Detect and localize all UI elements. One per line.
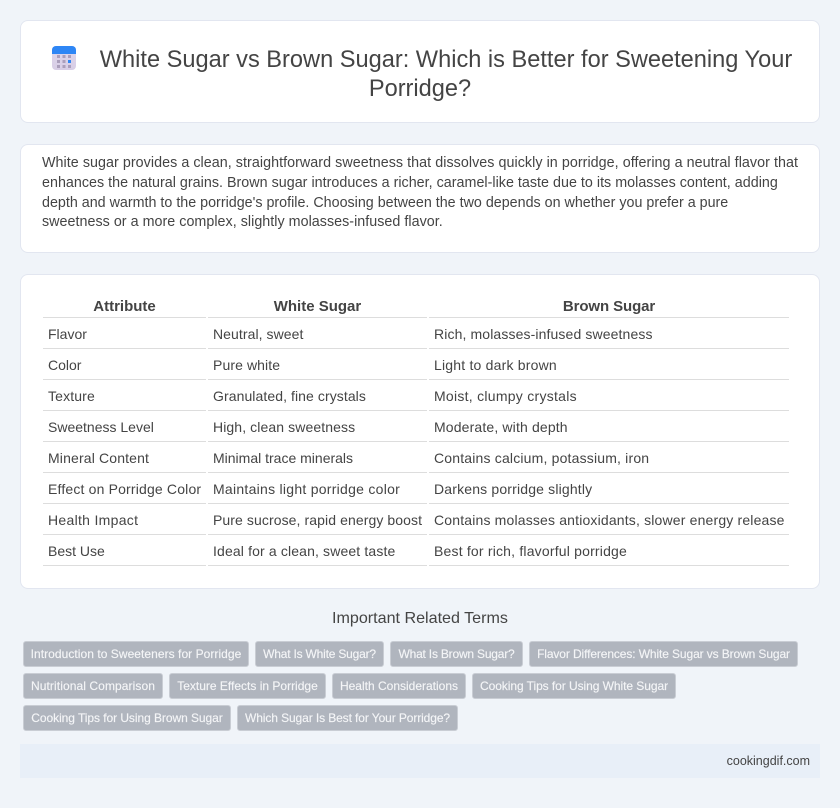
table: comparison: Moderate, with depth (434, 419, 568, 435)
panel: description (20, 144, 820, 253)
tag list: What Is Brown Sugar? (398, 647, 515, 661)
tag list: Nutritional Comparison (31, 679, 155, 693)
table: comparison: Texture (48, 388, 95, 404)
heading: important related terms: Important Related Terms (332, 609, 508, 627)
table: comparison: Best Use (48, 543, 105, 559)
title (100, 47, 792, 102)
text block: description: sweetness or a more complex, slightly molasses-infused flavor. (42, 214, 443, 230)
tag list (23, 641, 798, 731)
tag list: What Is White Sugar? (263, 647, 376, 661)
table: comparison: Granulated, fine crystals (213, 388, 366, 404)
table: comparison: Darkens porridge slightly (434, 481, 592, 497)
table: comparison: Maintains light porridge color (213, 481, 400, 497)
table: comparison: Neutral, sweet (213, 326, 303, 342)
title: Porridge? (369, 76, 471, 102)
table: comparison: Moist, clumpy crystals (434, 388, 577, 404)
text block: description: White sugar provides a clean, straightforward sweetness that dissolves quickly in porridge, offering a neutral flavor that (42, 155, 798, 171)
tag list: Cooking Tips for Using Brown Sugar (31, 711, 223, 725)
table: comparison: Rich, molasses-infused sweetness (434, 326, 653, 342)
tag list: Cooking Tips for Using White Sugar (480, 679, 668, 693)
footer source text: cookingdif.com (727, 754, 810, 768)
table: comparison: Pure white (213, 357, 280, 373)
table: comparison: Mineral Content (48, 450, 149, 466)
table: comparison: Effect on Porridge Color (48, 481, 201, 497)
table: comparison: Sweetness Level (48, 419, 154, 435)
text block: description: enhances the natural grains. Brown sugar introduces a richer, caramel-like taste due to its molasses content, adding (42, 175, 778, 191)
table: comparison: Attribute (93, 298, 156, 315)
table: comparison: Minimal trace minerals (213, 450, 353, 466)
table: comparison: Flavor (48, 326, 87, 342)
panel: header (20, 20, 820, 123)
text block: description: depth and warmth to the porridge's profile. Choosing between the two depends on whether you prefer a pure (42, 195, 728, 211)
table: comparison: Pure sucrose, rapid energy boost (213, 512, 422, 528)
table: comparison (43, 298, 789, 566)
table: comparison: Health Impact (48, 512, 138, 528)
tag list: Flavor Differences: White Sugar vs Brown Sugar (537, 647, 790, 661)
table: comparison: Contains calcium, potassium, iron (434, 450, 649, 466)
tag list: Texture Effects in Porridge (177, 679, 318, 693)
table: comparison: White Sugar (274, 298, 361, 315)
table: comparison: High, clean sweetness (213, 419, 355, 435)
icon: calendar (52, 46, 76, 70)
table: comparison: Brown Sugar (563, 298, 655, 315)
table: comparison: Light to dark brown (434, 357, 557, 373)
tag list: Which Sugar Is Best for Your Porridge? (245, 711, 450, 725)
table: comparison: Color (48, 357, 81, 373)
tag list: Health Considerations (340, 679, 458, 693)
table: comparison: Best for rich, flavorful porridge (434, 543, 627, 559)
table: comparison: Contains molasses antioxidants, slower energy release (434, 512, 785, 528)
table: comparison: Ideal for a clean, sweet taste (213, 543, 395, 559)
title: White Sugar vs Brown Sugar: Which is Better for Sweetening Your (100, 47, 792, 73)
text block: description (42, 155, 798, 230)
panel: comparison table (20, 274, 820, 589)
footer (20, 744, 820, 778)
tag list: Introduction to Sweeteners for Porridge (31, 647, 241, 661)
